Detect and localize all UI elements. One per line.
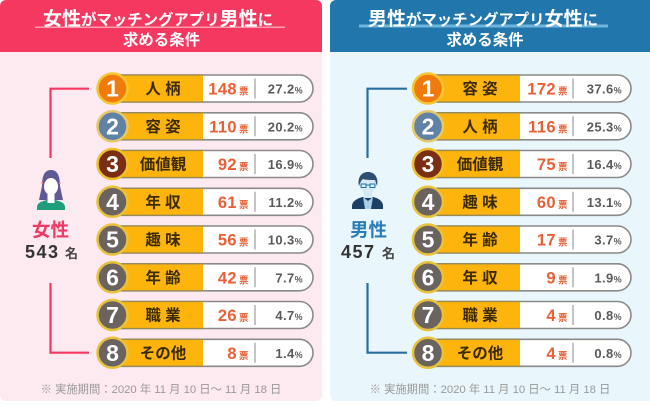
row 7: 職 業 [145, 306, 181, 324]
row 2: 容 姿 [145, 118, 181, 136]
label: women total [25, 220, 78, 262]
row 4: 4 [422, 189, 435, 215]
row 5: 10.3% [268, 232, 303, 248]
row 7 [98, 300, 313, 330]
label: men total: 男性 [350, 220, 387, 240]
row 8: その他 [457, 344, 504, 362]
row 8: 票 [558, 351, 568, 362]
header: women [0, 0, 322, 52]
label: men total: 名 [382, 246, 395, 261]
row 2: 20.2% [268, 119, 303, 134]
row 8: 0.8% [594, 346, 622, 361]
row 5: 票 [558, 238, 568, 248]
row 6: 票 [239, 275, 249, 286]
row 7: 0.8% [594, 308, 622, 323]
row 3 [98, 149, 313, 179]
row 2: 票 [558, 124, 568, 135]
row 7: 4.7% [275, 308, 303, 323]
label: men total [341, 220, 395, 262]
row 5 [98, 224, 313, 254]
row 5: 17 [537, 232, 556, 250]
row 6 [413, 262, 631, 292]
header: women: 女性がマッチングアプリ男性に [43, 8, 273, 30]
row 4: 票 [239, 200, 249, 211]
row 3: 75 [537, 156, 556, 174]
row 6 [98, 262, 313, 292]
row 4: 61 [218, 194, 237, 212]
row 1: 1 [106, 76, 119, 102]
row 6: 42 [218, 269, 237, 287]
row 8: その他 [140, 344, 187, 362]
row 3: 票 [558, 162, 568, 173]
row 4: 趣 味 [462, 193, 498, 211]
header: men [330, 0, 650, 52]
footnote: men: ※ 実施期間：2020 年 11 月 10 日～ 11 月 18 日 [370, 382, 610, 396]
row 1: 172 [527, 80, 556, 98]
row 4: 票 [558, 200, 568, 211]
row 5: 5 [422, 226, 435, 252]
row 6: 7.7% [275, 270, 303, 285]
row 4: 60 [537, 194, 556, 212]
label: men total: 457 [341, 242, 376, 262]
row 5: 年 齢 [462, 230, 498, 249]
header: women: 求める条件 [123, 30, 200, 49]
row 1: 37.6% [587, 82, 622, 96]
row 2: 2 [106, 113, 119, 139]
row 4 [413, 187, 631, 217]
panel: men [330, 0, 650, 401]
label: women total: 名 [65, 246, 78, 261]
row 3: 3 [422, 151, 434, 177]
label: women total: 543 [25, 242, 60, 262]
row 8: 8 [227, 345, 237, 363]
row 7: 職 業 [462, 306, 498, 324]
row 7: 票 [239, 313, 249, 324]
row 1 [98, 74, 313, 104]
row 5: 票 [239, 238, 249, 248]
row 3: 92 [218, 156, 237, 174]
row 5: 5 [106, 226, 119, 252]
row 8: 8 [422, 340, 435, 366]
row 5 [413, 224, 631, 254]
row 2: 116 [528, 118, 556, 136]
row 4: 4 [106, 189, 119, 215]
row 6: 年 齢 [145, 268, 181, 287]
row 3: 票 [239, 162, 249, 173]
row 7: 7 [422, 302, 434, 328]
row 8: 8 [106, 340, 119, 366]
row 4 [98, 187, 313, 217]
row 5: 56 [218, 232, 237, 250]
row 2 [98, 111, 313, 141]
row 2: 25.3% [587, 119, 622, 134]
row 1 [413, 74, 631, 104]
row 6: 年 収 [462, 268, 498, 287]
row 1: 票 [558, 86, 568, 98]
row 1: 容 姿 [462, 80, 498, 98]
panel: women [0, 0, 322, 401]
row 6: 9 [546, 269, 556, 287]
row 3: 価値観 [140, 156, 187, 174]
row 7: 7 [106, 302, 119, 328]
row 7: 4 [546, 307, 556, 325]
row 3 [413, 149, 631, 179]
icon: man [352, 172, 383, 209]
row 6: 票 [558, 275, 568, 286]
row 3: 価値観 [457, 156, 504, 174]
bracket connector: women [50, 89, 89, 353]
row 8: 4 [546, 345, 556, 363]
bracket connector: men [368, 89, 407, 353]
row 3: 3 [106, 151, 119, 177]
header: men: 男性がマッチングアプリ女性に [368, 8, 598, 30]
row 8: 票 [239, 351, 249, 362]
row 1: 27.2% [268, 82, 303, 96]
row 4: 11.2% [268, 195, 303, 210]
row 8: 1.4% [275, 346, 303, 361]
row 7: 票 [558, 313, 568, 324]
row 6: 1.9% [594, 270, 622, 285]
row 1: 人 柄 [145, 80, 181, 98]
row 2: 2 [422, 113, 434, 139]
row 2: 人 柄 [462, 118, 498, 136]
row 5: 趣 味 [145, 231, 181, 249]
row 1: 148 [208, 80, 237, 98]
row 2: 票 [239, 124, 249, 135]
icon: woman [37, 170, 65, 210]
row 2: 110 [209, 118, 237, 136]
row 7: 26 [218, 307, 237, 325]
row 2 [413, 111, 631, 141]
label: women total: 女性 [32, 220, 69, 240]
row 4: 13.1% [587, 195, 622, 210]
row 1: 1 [422, 76, 435, 102]
row 6: 6 [422, 264, 434, 290]
row 3: 16.4% [587, 157, 622, 172]
row 3: 16.9% [268, 157, 303, 172]
row 7 [413, 300, 631, 330]
row 8 [98, 338, 313, 368]
header: men: 求める条件 [447, 30, 523, 49]
footnote: women: ※ 実施期間：2020 年 11 月 10 日～ 11 月 18 日 [41, 382, 281, 396]
row 5: 3.7% [594, 232, 622, 248]
row 6: 6 [106, 264, 119, 290]
row 1: 票 [239, 86, 249, 98]
row 8 [413, 338, 631, 368]
row 4: 年 収 [145, 192, 181, 211]
